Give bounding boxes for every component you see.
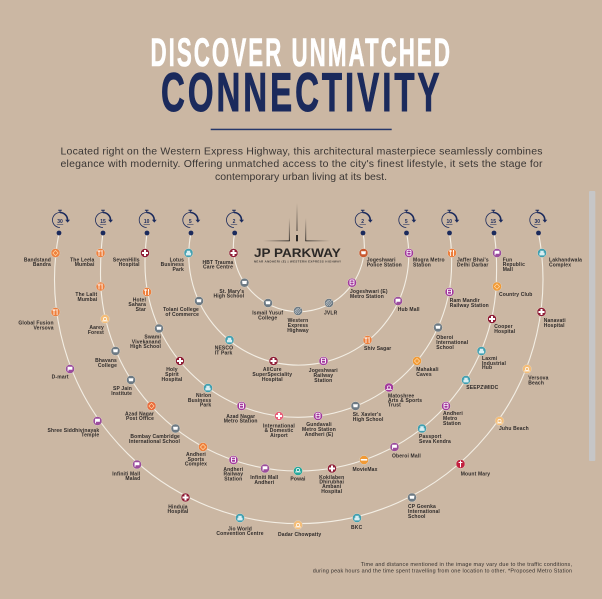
timer: 15 min left: 15: [100, 219, 106, 225]
stop: Gundavali Metro Station Andheri (E): Metro Station: [302, 427, 336, 433]
stop: Jogeshwari Railway Station: Railway: [313, 373, 333, 379]
stop: Western Express Highway: Express: [288, 323, 308, 329]
stop: Laxmi Industrial Hub: Laxmi: [482, 356, 498, 362]
heading divider: [211, 129, 392, 130]
stop: The Lalit Mumbai: [75, 282, 105, 303]
stop: Jogeshwari Railway Station: Jogeshwari: [309, 368, 338, 374]
stop: Juhu Beach: Juhu Beach: [499, 426, 529, 432]
stops: 30 minute arc: [18, 248, 582, 538]
stop: SP Jain Institute: Institute: [111, 391, 132, 397]
stop: Laxmi Industrial Hub: Hub: [482, 365, 492, 371]
stops: 2 minute arc: [203, 248, 402, 334]
logo: JP Parkway: NEAR ANDHERI (E) | WESTERN EXPRESS HIGHWAY: [254, 260, 341, 264]
stop: JVLR: JVLR: [324, 310, 338, 316]
stop: CP Goenka International School: International: [408, 509, 440, 515]
stop: Jogeshwari (E) Metro Station: [348, 278, 388, 300]
stop: AllCure SuperSpeciality Hospital: [252, 356, 292, 383]
stop: Mount Mary: [456, 460, 490, 478]
timer: 2 min right: [355, 210, 373, 235]
stop: Andheri Metro Station: Station: [443, 421, 461, 427]
stop: Fun Republic Mall: [492, 248, 525, 273]
stop: Shiv Sagar: [363, 336, 391, 352]
stop: Oberoi Mall: Oberoi Mall: [392, 454, 421, 460]
stop: Passport Seva Kendra: [418, 424, 451, 445]
stop: Azad Nagar Post Office: Post Office: [126, 416, 154, 422]
stop: Nirlon Business Park: Business: [188, 398, 211, 404]
stop: Western Express Highway: Highway: [287, 328, 309, 334]
timer: 30 min right: 30: [535, 219, 540, 225]
stop: Nanavati Hospital: Nanavati: [544, 318, 566, 324]
stop: Gundavali Metro Station Andheri (E): [302, 412, 336, 438]
footnote: [313, 562, 572, 574]
stop: Nirlon Business Park: Park: [200, 402, 211, 408]
stop: St. Xavier's High School: St. Xavier's: [353, 412, 381, 418]
stop: BKC: BKC: [351, 525, 363, 531]
timer: 2 min left: 2: [233, 219, 236, 225]
stop: Cooper Hospital: [488, 314, 516, 335]
stop: Gundavali Metro Station Andheri (E): Andheri (E): [305, 432, 333, 438]
stop: Mahakali Caves: Mahakali: [416, 367, 439, 373]
timer: 15 min right: 15: [491, 219, 496, 225]
stop: Western Express Highway: Western: [288, 318, 308, 324]
stop: Matoshree Arts & Sports Trust: Trust: [388, 402, 401, 408]
stop: Laxmi Industrial Hub: Industrial: [482, 361, 506, 367]
stop: Matoshree Arts & Sports Trust: Arts & Sports: [388, 398, 422, 404]
stop: SevenHills Hospital: [113, 248, 150, 268]
intro paragraph: Located right on the Western Express Highway, this architectural masterpiece seamlessly combines: [60, 145, 542, 157]
timers and route end dots: [52, 210, 547, 235]
stop: Oberoi International School: School: [436, 345, 454, 351]
stop: Laxmi Industrial Hub: [477, 346, 506, 371]
stop: Hotel Sahara Star: Hotel: [133, 298, 146, 304]
route arcs: [55, 233, 543, 524]
stop: CP Goenka International School: School: [408, 514, 426, 520]
stop: Bombay Cambridge International School: [129, 424, 180, 445]
stop: Fun Republic Mall: Fun: [503, 258, 512, 264]
stop: Hinduja Hospital: Hinduja: [168, 504, 188, 510]
stop: Kokilaben Dhirubhai Ambani Hospital: [319, 464, 344, 495]
stop: Ismail Yusuf College: College: [258, 316, 277, 322]
stop: St. Xavier's High School: [351, 402, 384, 423]
stop: Infiniti Mall Andheri: Infiniti Mall: [250, 475, 279, 481]
stop: Cooper Hospital: Hospital: [494, 329, 516, 335]
stop: Swami Vivekanand High School: Swami: [144, 334, 161, 340]
timer: 10 min left: [139, 210, 157, 235]
stop: SP Jain Institute: [111, 376, 136, 397]
stop: HBT Trauma Care Centre: [203, 248, 238, 271]
stop: Andheri Metro Station: Metro: [443, 416, 457, 422]
stop: Versova Beach: [522, 364, 549, 386]
stop: Hinduja Hospital: Hospital: [168, 509, 189, 515]
stop: Jaffer Bhai's Delhi Darbar: Jaffer Bhai's: [457, 258, 489, 264]
stop: Nanavati Hospital: Hospital: [544, 323, 565, 329]
stop: Azad Nagar Metro Station: [224, 402, 258, 424]
stop: Andheri Metro Station: [442, 402, 463, 427]
stop: Jogeshwari Police Station: Police Station: [367, 262, 402, 268]
stop: Kokilaben Dhirubhai Ambani Hospital: Hospital: [321, 489, 343, 495]
stop: Hotel Sahara Star: [128, 288, 152, 313]
stop: Matoshree Arts & Sports Trust: Matoshree: [388, 394, 414, 400]
stop: Gundavali Metro Station Andheri (E): Gundavali: [306, 422, 332, 428]
stop: Versova Beach: Beach: [528, 380, 544, 386]
stop: Infiniti Mall Malad: Malad: [125, 476, 140, 482]
stop: Jaffer Bhai's Delhi Darbar: Delhi Darbar: [457, 262, 489, 268]
stop: The Leela Mumbai: Mumbai: [75, 262, 95, 268]
stop: Jogeshwari (E) Metro Station: Metro Station: [350, 294, 384, 300]
stop: Shree Siddhivinayak Temple: [48, 416, 102, 438]
timer: 2 min left: [226, 210, 244, 235]
stop: Dadar Chowpatty: [278, 520, 321, 538]
stop: Mogra Metro Station: Mogra Metro: [413, 258, 445, 264]
stop: International & Domestic Airport: [263, 412, 295, 439]
stop: The Leela Mumbai: [70, 248, 105, 268]
timer: 30 min left: [52, 210, 70, 235]
stop: SevenHills Hospital: Hospital: [119, 262, 140, 268]
stop: Aarey Forest: Aarey: [89, 325, 104, 331]
stop: Lakhandwala Complex: Complex: [549, 262, 571, 268]
stop: Fun Republic Mall: Republic: [503, 262, 525, 268]
timer: 30 min left: 30: [57, 219, 63, 225]
intro paragraph: [60, 145, 543, 183]
stop: Powai: [290, 466, 306, 482]
stop: Kokilaben Dhirubhai Ambani Hospital: Dhirubhai: [319, 480, 344, 486]
footnote: Time and distance mentioned in the image may vary due to the traffic conditions,: [361, 562, 572, 568]
timer: 5 min right: 5: [405, 219, 408, 225]
stop: Shiv Sagar: Shiv Sagar: [364, 346, 391, 352]
stop: Mount Mary: Mount Mary: [461, 472, 490, 478]
timer: 10 min right: [442, 210, 459, 235]
stop: Country Club: [492, 282, 532, 298]
stop: SevenHills Hospital: SevenHills: [113, 258, 140, 264]
stop: Mahakali Caves: Caves: [416, 372, 432, 378]
stop: Western Express Highway: [287, 306, 309, 334]
stop: Cooper Hospital: Cooper: [494, 324, 513, 330]
stop: NESCO IT Park: IT Park: [215, 350, 232, 356]
stop: Bandstand Bandra: Bandra: [33, 262, 51, 268]
stop: Lotus Business Park: Lotus: [170, 258, 184, 264]
stop: Lotus Business Park: Business: [161, 262, 184, 268]
stop: Nirlon Business Park: [188, 384, 212, 408]
stop: Andheri Sports Complex: Andheri: [186, 452, 206, 458]
stop: Hinduja Hospital: [168, 493, 190, 515]
stop: NESCO IT Park: [215, 336, 234, 356]
stop: Jogeshwari Railway Station: Station: [314, 378, 332, 384]
stop: Passport Seva Kendra: Seva Kendra: [419, 439, 451, 445]
stop: Bhavans College: College: [98, 363, 117, 369]
stop: Holy Spirit Hospital: [162, 356, 184, 383]
stop: Tolani College of Commerce: [163, 296, 204, 318]
stop: Ram Mandir Railway Station: [445, 288, 489, 309]
stop: Andheri Sports Complex: Complex: [185, 462, 207, 468]
stop: Ram Mandir Railway Station: Railway Station: [450, 303, 489, 309]
stop: The Lalit Mumbai: The Lalit: [75, 292, 97, 298]
stop: Infiniti Mall Andheri: Andheri: [254, 480, 275, 486]
stop: Azad Nagar Metro Station: Azad Nagar: [226, 414, 255, 420]
stop: St. Mary's High School: [213, 278, 249, 300]
stop: D-mart: D-mart: [52, 374, 69, 380]
stop: Andheri Sports Complex: Sports: [188, 457, 204, 463]
stop: Juhu Beach: [495, 416, 529, 432]
timer: 2 min right: 2: [361, 219, 364, 225]
stop: Versova Beach: Versova: [528, 376, 549, 382]
stop: Andheri Railway Station: Andheri: [223, 467, 244, 473]
stop: Jio World Convention Centre: Jio World: [228, 526, 252, 532]
stop: Azad Nagar Metro Station: Metro Station: [224, 418, 258, 424]
stop: D-mart: [52, 364, 74, 380]
stop: Oberoi Mall: [390, 442, 421, 460]
stop: Global Fusion Versova: Global Fusion: [18, 320, 54, 326]
stop: Infiniti Mall Andheri: [250, 464, 279, 486]
stop: CP Goenka International School: CP Goenka: [408, 504, 436, 510]
stop: Swami Vivekanand High School: [130, 324, 164, 350]
stop: Shree Siddhivinayak Temple: Shree Siddhivinayak: [48, 428, 99, 434]
stop: Global Fusion Versova: Versova: [33, 326, 54, 332]
stop: Passport Seva Kendra: Passport: [419, 434, 442, 440]
stop: Swami Vivekanand High School: High School: [130, 344, 161, 350]
stop: AllCure SuperSpeciality Hospital: Hospital: [262, 377, 283, 383]
stop: Jogeshwari Police Station: Jogeshwari: [367, 258, 396, 264]
timer: 5 min left: 5: [189, 219, 192, 225]
stop: St. Xavier's High School: High School: [353, 417, 384, 423]
stop: SP Jain Institute: SP Jain: [113, 386, 132, 392]
stop: Lakhandwala Complex: [538, 248, 582, 268]
stop: Lakhandwala Complex: Lakhandwala: [549, 258, 582, 264]
stop: Global Fusion Versova: [18, 308, 60, 332]
stop: Ram Mandir Railway Station: Ram Mandir: [450, 298, 480, 304]
stop: Jio World Convention Centre: Convention Centre: [216, 531, 264, 537]
timer: 5 min right: [399, 210, 416, 235]
stop: Aarey Forest: Forest: [88, 330, 104, 336]
stop: Bombay Cambridge International School: International School: [129, 439, 180, 445]
stop: The Leela Mumbai: The Leela: [70, 258, 95, 264]
stop: Andheri Railway Station: [223, 456, 244, 482]
logo: JP Parkway: JP PARKWAY: [254, 248, 341, 260]
stop: BKC: [351, 514, 363, 531]
timer: 15 min left: [96, 210, 113, 235]
stop: International & Domestic Airport: Airport: [270, 433, 288, 439]
stop: Azad Nagar Post Office: Azad Nagar: [125, 412, 154, 418]
stop: Andheri Railway Station: Station: [224, 476, 242, 482]
timer: 5 min left: [183, 210, 200, 235]
stop: Mogra Metro Station: [404, 248, 445, 268]
footnote: during peak hours and the time spent travelling from one location to other. *Proposed Metro Station: [313, 568, 572, 574]
stop: JVLR: [324, 298, 338, 316]
stops: 5 minute arc: [161, 248, 445, 384]
stop: Oberoi International School: [434, 323, 469, 351]
stop: Hotel Sahara Star: Star: [136, 307, 146, 313]
intro paragraph: contemporary urban living at its best.: [215, 171, 387, 183]
stop: Lotus Business Park: Park: [173, 267, 184, 273]
stop: Nanavati Hospital: [537, 308, 566, 329]
stop: NESCO IT Park: NESCO: [215, 346, 233, 352]
stop: AllCure SuperSpeciality Hospital: AllCure: [263, 367, 282, 373]
stop: Powai: Powai: [290, 476, 306, 482]
stop: International & Domestic Airport: International: [263, 424, 295, 430]
stop: Infiniti Mall Malad: [112, 460, 142, 482]
timer: 10 min left: 10: [144, 219, 150, 225]
stop: Andheri Sports Complex: [185, 442, 208, 468]
stop: CP Goenka International School: [408, 493, 440, 520]
stops: 10 minute arc: [113, 248, 489, 439]
stop: Aarey Forest: [88, 314, 110, 336]
stop: Fun Republic Mall: Mall: [503, 267, 513, 273]
stop: Jaffer Bhai's Delhi Darbar: [448, 248, 489, 268]
stop: Oberoi International School: International: [436, 340, 469, 346]
stop: Jogeshwari Police Station: [359, 248, 402, 268]
stop: HBT Trauma Care Centre: HBT Trauma: [203, 260, 234, 266]
stop: Ismail Yusuf College: Ismail Yusuf: [252, 310, 283, 316]
stop: Bhavans College: [95, 346, 120, 369]
stop: Lotus Business Park: [161, 248, 193, 273]
stop: Oberoi International School: Oberoi: [436, 335, 454, 341]
stop: SEEPZ\MIDC: [462, 376, 499, 391]
timer: 10 min right: 10: [447, 219, 452, 225]
stop: Hotel Sahara Star: Sahara: [128, 302, 146, 308]
stop: Holy Spirit Hospital: Spirit: [165, 372, 179, 378]
timer: 15 min right: [486, 210, 503, 235]
stop: Tolani College of Commerce: of Commerce: [165, 312, 199, 318]
stop: Jogeshwari (E) Metro Station: Jogeshwari (E): [350, 289, 388, 295]
stop: MovieMax: MovieMax: [352, 467, 378, 473]
stop: Kokilaben Dhirubhai Ambani Hospital: Ambani: [322, 484, 342, 490]
stop: HBT Trauma Care Centre: Care Centre: [203, 265, 233, 271]
stop: St. Mary's High School: St. Mary's: [219, 289, 244, 295]
stop: Nirlon Business Park: Nirlon: [196, 393, 211, 399]
stop: Mogra Metro Station: Station: [413, 262, 431, 268]
stop: Holy Spirit Hospital: Hospital: [162, 377, 183, 383]
stop: Shree Siddhivinayak Temple: Temple: [81, 432, 99, 438]
stop: Bandstand Bandra: Bandstand: [24, 258, 51, 264]
stop: Bombay Cambridge International School: Bombay Cambridge: [130, 434, 180, 440]
stop: Infiniti Mall Malad: Infiniti Mall: [112, 472, 141, 478]
stop: Kokilaben Dhirubhai Ambani Hospital: Kokilaben: [319, 475, 344, 481]
stop: Tolani College of Commerce: Tolani College: [163, 307, 199, 313]
stop: Bhavans College: Bhavans: [95, 358, 117, 364]
stop: Matoshree Arts & Sports Trust: [384, 383, 422, 408]
stop: Country Club: Country Club: [499, 292, 532, 298]
stop: International & Domestic Airport: & Domestic: [264, 428, 294, 434]
stop: Andheri Metro Station: Andheri: [443, 411, 463, 417]
stop: Hub Mall: [394, 296, 420, 313]
stop: St. Mary's High School: High School: [213, 294, 245, 300]
scrollbar strip: [589, 191, 595, 461]
stop: Jogeshwari Railway Station: [309, 356, 338, 384]
stop: Ismail Yusuf College: [252, 298, 283, 322]
stop: Mahakali Caves: [412, 356, 439, 378]
stops: 15 minute arc: [70, 248, 532, 495]
stop: MovieMax: [352, 456, 378, 473]
stop: SEEPZ\MIDC: SEEPZ\MIDC: [466, 385, 499, 391]
stop: Swami Vivekanand High School: Vivekanand: [132, 340, 161, 346]
stop: Dadar Chowpatty: Dadar Chowpatty: [278, 532, 321, 538]
stop: Azad Nagar Post Office: [125, 402, 156, 422]
stop: Holy Spirit Hospital: Holy: [166, 367, 178, 373]
logo: JP Parkway: [254, 203, 341, 264]
timer: 30 min right: [530, 210, 547, 235]
stop: AllCure SuperSpeciality Hospital: SuperSpeciality: [252, 372, 292, 378]
stop: The Lalit Mumbai: Mumbai: [78, 297, 98, 303]
intro paragraph: elegance with modernity. Offering unmatched access to the city's finest lifestyle, it sets the stage for: [60, 158, 543, 170]
stop: Bandstand Bandra: [24, 248, 60, 268]
stop: Jio World Convention Centre: [216, 514, 264, 537]
stop: Andheri Railway Station: Railway: [223, 472, 243, 478]
stop: Hub Mall: Hub Mall: [398, 307, 420, 313]
